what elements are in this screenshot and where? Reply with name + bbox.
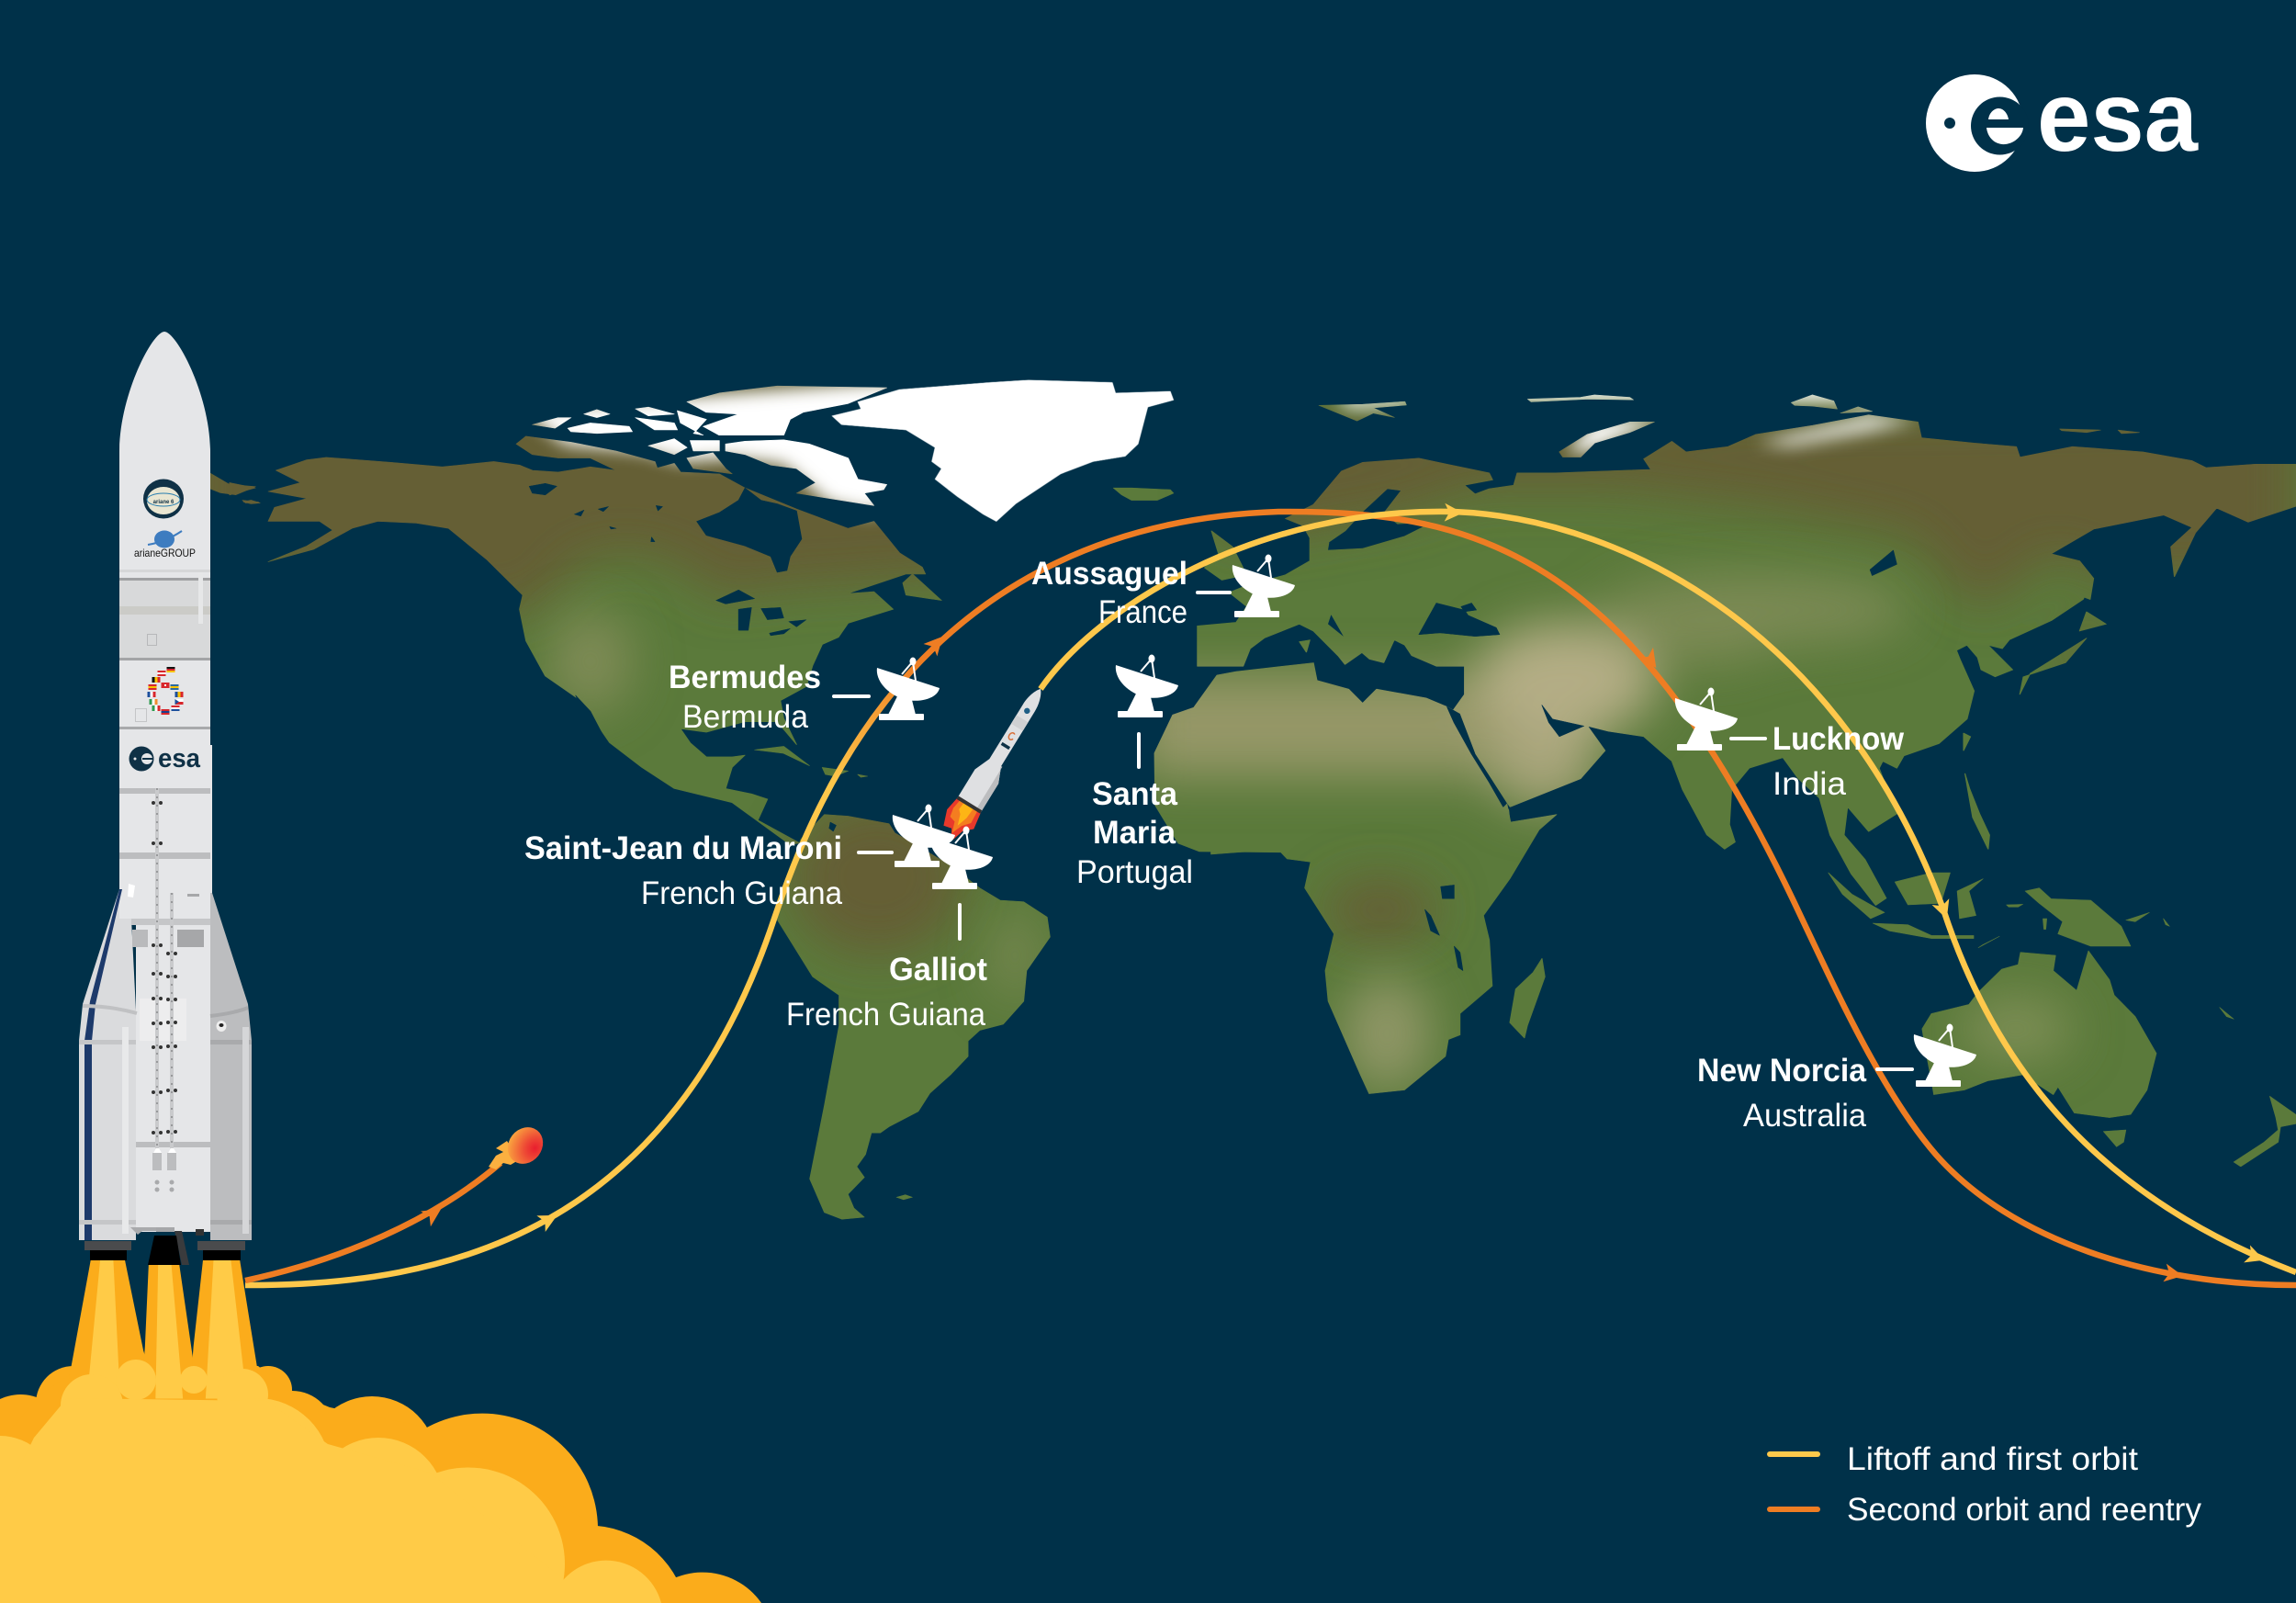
ground station: Aussaguel: [1232, 555, 1295, 617]
label: Lucknow: India: [1773, 766, 1847, 802]
label: Aussaguel: Aussaguel: [1031, 556, 1187, 592]
label: Lucknow: Lucknow: [1773, 721, 1905, 757]
booster white tip: [128, 884, 135, 897]
mission patch: [143, 480, 184, 518]
continent: Oceania: [1883, 928, 2296, 1167]
mission patch: ariane 6: [153, 500, 174, 505]
label: Santa Maria: Santa: [1092, 776, 1178, 812]
label: Aussaguel: France: [1098, 594, 1187, 630]
ground station: Santa Maria: [1116, 654, 1178, 717]
rocket esa logo: [129, 744, 201, 773]
label: Galliot: [786, 903, 987, 1033]
rocket flames: [934, 796, 984, 848]
icon: reentry fireball: [489, 1120, 550, 1171]
label: Bermudes: Bermuda: [682, 699, 809, 735]
label: Santa Maria: Portugal: [1076, 854, 1193, 890]
rocket esa logo: esa: [158, 744, 201, 773]
ArianeGroup logo: [134, 531, 196, 559]
booster blue stripe: [84, 889, 122, 1240]
cable ducts: [152, 788, 177, 1192]
label: Saint-Jean du Maroni: [524, 830, 894, 911]
polar ice: [520, 380, 1919, 514]
ground station: Lucknow: [1675, 687, 1738, 751]
boosters left: [79, 889, 136, 1240]
logo: esa: esa: [2037, 61, 2199, 172]
legend item: second orbit: Second orbit and reentry: [1847, 1492, 2201, 1528]
label: Galliot: French Guiana: [786, 997, 985, 1033]
continent: Siberian tip: [210, 473, 214, 491]
label: Bermudes: [669, 660, 871, 735]
nozzles: [84, 1227, 245, 1265]
climate zones: tundra and forest browns: [184, 349, 2296, 955]
small ascending Ariane 6 rocket: [934, 681, 1054, 848]
Greenland: [832, 380, 1174, 522]
island: Iceland: [1113, 487, 1174, 501]
legend: [1767, 1441, 2201, 1528]
label: New Norcia: [1697, 1053, 1914, 1134]
climate zones: arid olive and desert tan: [549, 575, 2073, 1090]
world map: [184, 349, 2296, 1222]
logo: esa: [1926, 61, 2199, 172]
label: Saint-Jean du Maroni: Saint-Jean du Maroni: [524, 830, 842, 866]
exhaust flames: [69, 1260, 259, 1398]
orbit: first orbit, yellow: [1041, 512, 2296, 1272]
continent: Eurasia: [1197, 395, 2296, 873]
ArianeGroup logo: arianeGROUP: [134, 547, 196, 559]
launch cloud: inner yellow: [0, 1360, 661, 1603]
ground station: Saint-Jean du Maroni: [893, 805, 955, 867]
ground station: Bermudes: [877, 658, 940, 720]
continent: South America: [777, 864, 1051, 1220]
label: Santa Maria: Maria: [1093, 815, 1176, 851]
orbit: launcher stage reentry branch: [245, 1163, 501, 1281]
legend item: first orbit: Liftoff and first orbit: [1847, 1441, 2138, 1477]
ground station: New Norcia: [1914, 1023, 1976, 1087]
core stage and fairing: [119, 332, 212, 1232]
booster details: [79, 1006, 252, 1234]
ground station: Galliot: [930, 827, 993, 889]
main Ariane 6 rocket: [79, 332, 252, 1265]
label: Bermudes: Bermudes: [669, 660, 821, 695]
continent: North America: [268, 525, 942, 832]
label: New Norcia: New Norcia: [1697, 1053, 1867, 1089]
European flags forming a 6: [147, 667, 184, 715]
launch cloud: outer orange: [0, 1366, 761, 1603]
label: Saint-Jean du Maroni: French Guiana: [641, 875, 842, 911]
label: Aussaguel: [1031, 556, 1232, 630]
label: Galliot: Galliot: [889, 952, 987, 988]
label: Lucknow: [1729, 721, 1905, 802]
orbit: launch, yellow then orange second orbit and reentry: [245, 512, 2296, 1285]
continent: Africa: [1154, 714, 1546, 1094]
direction arrows: [421, 503, 2268, 1285]
core stage bands and panels: [119, 570, 210, 1147]
label: Santa Maria: [1076, 732, 1193, 890]
booster right: [210, 893, 252, 1240]
label: New Norcia: Australia: [1743, 1098, 1867, 1134]
